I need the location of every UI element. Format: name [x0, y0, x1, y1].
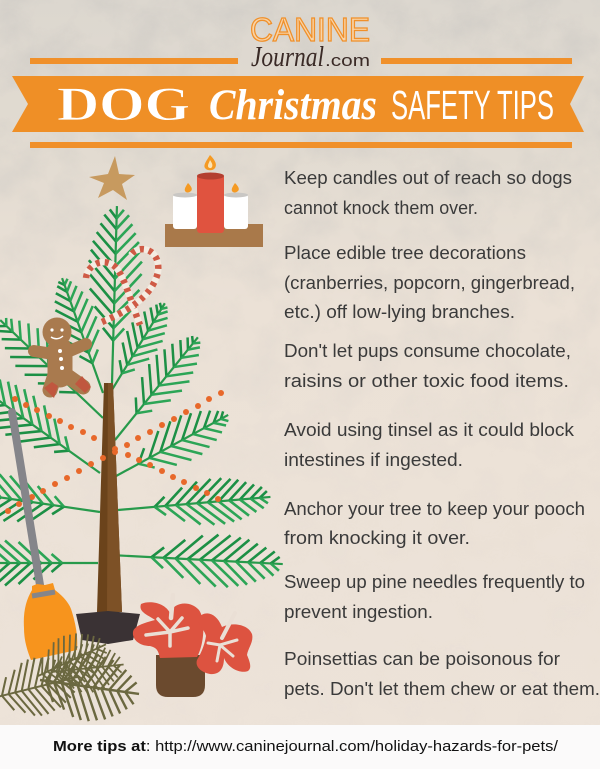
- poinsettia flowers: [133, 595, 252, 674]
- tip: poinsettias: pets. Don't let them chew or eat them.: [284, 679, 600, 699]
- tip: pine needles: [284, 572, 585, 622]
- tip: edible decorations: [284, 243, 575, 322]
- logo: Canine Journal: .com: [325, 51, 370, 70]
- tip: chocolate: Don't let pups consume chocolate,: [284, 341, 571, 361]
- tip: anchor tree: Anchor your tree to keep your pooch: [284, 499, 585, 519]
- footer link text: More tips at : http://www.caninejournal.com/holiday-hazards-for-pets/: [53, 738, 559, 755]
- tip: chocolate: [284, 341, 571, 391]
- footer strip: [0, 725, 600, 769]
- logo: Canine Journal: CANINE: [250, 11, 370, 48]
- header rule bottom: [30, 142, 572, 148]
- flower pot: [156, 655, 205, 697]
- gingerbread man: [34, 318, 91, 398]
- tips text: [284, 168, 600, 699]
- tip: candles: cannot knock them over.: [284, 198, 478, 218]
- candles on shelf: [165, 155, 263, 247]
- tip: tinsel: Avoid using tinsel as it could block: [284, 420, 575, 440]
- logo: Canine Journal: Journal: [251, 41, 324, 73]
- broom: [12, 412, 77, 660]
- candy cane left: [86, 262, 140, 325]
- tree fronds: [0, 205, 284, 590]
- garland dots: [5, 390, 224, 514]
- tip: chocolate: raisins or other toxic food items.: [284, 371, 569, 391]
- header rule left: [30, 58, 238, 64]
- tip: tinsel: intestines if ingested.: [284, 450, 463, 470]
- tip: candles: [284, 168, 572, 218]
- tree stand: [76, 611, 140, 644]
- logo: Canine Journal: [250, 11, 370, 73]
- tip: poinsettias: [284, 649, 600, 699]
- tip: pine needles: Sweep up pine needles frequently to: [284, 572, 585, 592]
- tip: edible decorations: etc.) off low-lying branches.: [284, 302, 515, 322]
- tip: candles: Keep candles out of reach so dogs: [284, 168, 572, 188]
- tip: poinsettias: Poinsettias can be poisonous for: [284, 649, 560, 669]
- tip: anchor tree: from knocking it over.: [284, 528, 470, 548]
- title ribbon: Christmas: [209, 82, 377, 129]
- pine sprig: [0, 621, 144, 728]
- header rule right: [381, 58, 572, 64]
- tip: edible decorations: (cranberries, popcorn, gingerbread,: [284, 273, 575, 293]
- tip: pine needles: prevent ingestion.: [284, 602, 433, 622]
- title ribbon: [12, 76, 584, 132]
- tree trunk: [97, 383, 122, 612]
- title word: DOG: DOG: [57, 78, 190, 131]
- background texture: [0, 0, 600, 286]
- tip: tinsel: [284, 420, 575, 470]
- tip: anchor tree: [284, 499, 585, 548]
- star tree topper: [89, 156, 135, 200]
- tip: edible decorations: Place edible tree decorations: [284, 243, 526, 263]
- candy cane right: [102, 249, 158, 322]
